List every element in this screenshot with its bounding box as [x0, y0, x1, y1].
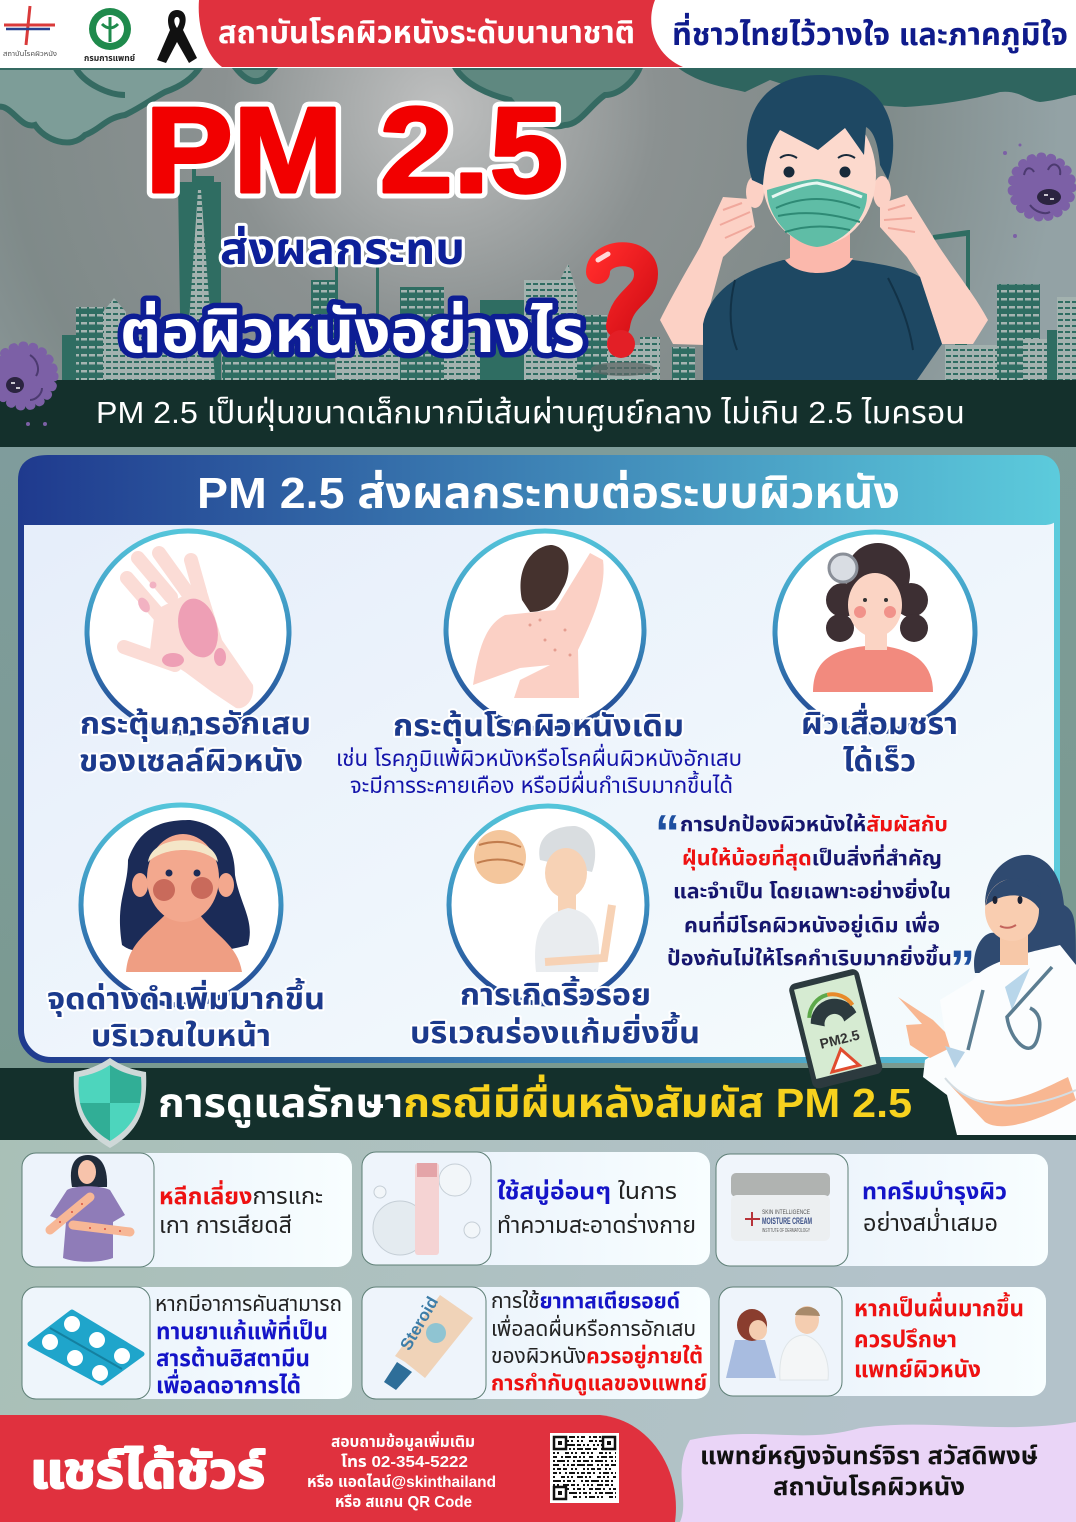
effect: inflammation	[79, 531, 311, 778]
virus left	[0, 346, 54, 426]
care card: avoid scratching	[22, 1153, 352, 1267]
effect: inflammation: กระตุ้นการอักเสบ	[80, 708, 311, 742]
pointing hand	[898, 997, 950, 1058]
question mark	[598, 254, 646, 358]
header bar	[0, 0, 1076, 68]
care card: antihistamine: ทานยาแก้แพ้ที่เป็น	[156, 1315, 328, 1344]
logo: department of medical services	[84, 8, 135, 63]
care card: moisturiser: ทาครีมบำรุงผิว	[862, 1178, 1007, 1205]
institute slogan: สถาบันโรคผิวหนังระดับนานาชาติ	[218, 15, 635, 50]
head	[746, 176, 764, 208]
effect: existing skin disease: จะมีการระคายเคือง หรือมีผื่นกำเริบมากขึ้นได้	[350, 770, 733, 798]
author credit: สถาบันโรคผิวหนัง	[773, 1473, 965, 1501]
effect: premature ageing: ผิวเสื่อมชรา	[801, 702, 958, 741]
effect: wrinkles: การเกิดริ้วรอย	[460, 975, 651, 1012]
care card: moisturiser: MOISTURE CREAM	[762, 1216, 812, 1226]
care card: consult dermatologist: หากเป็นผื่นมากขึ้น	[854, 1292, 1024, 1321]
phone	[788, 968, 884, 1090]
effect: dark spots	[47, 805, 325, 1053]
care card: mild soap: ใช้สบู่อ่อนๆ ในการ	[497, 1178, 677, 1205]
doctor quote: ”	[950, 940, 975, 996]
virus right	[1003, 144, 1072, 238]
care card: moisturiser	[716, 1154, 1048, 1266]
effect: existing skin disease	[336, 531, 742, 798]
face	[1000, 930, 1028, 965]
doctor quote: ป้องกันไม่ให้โรคกำเริบมากยิ่งขึ้น	[667, 944, 952, 970]
subtitle line 2: ต่อผิวหนังอย่างไร	[120, 298, 585, 365]
icon: black ribbon	[157, 10, 197, 63]
crossed arm	[950, 1077, 1076, 1126]
stethoscope	[968, 967, 1052, 1050]
doctor quote: และจำเป็น โดยเฉพาะอย่างยิ่งใน	[673, 878, 951, 903]
person with mask	[660, 75, 988, 380]
care card: moisturiser: อย่างสม่ำเสมอ	[863, 1207, 998, 1236]
QR code	[550, 1433, 619, 1503]
care card: avoid scratching: เกา การเสียดสี	[159, 1212, 292, 1238]
care card: consult dermatologist	[719, 1287, 1046, 1396]
contact text	[307, 1431, 496, 1511]
arms	[660, 197, 755, 345]
author credit: แพทย์หญิงจันทร์จิรา สวัสดิพงษ์	[700, 1442, 1038, 1470]
definition strip: PM 2.5 เป็นฝุ่นขนาดเล็กมากมีเส้นผ่านศูนย์กลาง ไม่เกิน 2.5 ไมครอน	[96, 395, 965, 431]
effect: wrinkles: บริเวณร่องแก้มยิ่งขึ้น	[410, 1011, 700, 1050]
care card: steroid cream: ของผิวหนังควรอยู่ภายใต้	[491, 1345, 703, 1369]
effect: premature ageing	[775, 532, 975, 778]
PM 2.5: PM 2.5	[145, 82, 563, 218]
care card: moisturiser: INSTITUTE OF DERMATOLOGY	[762, 1228, 810, 1234]
care card: steroid cream: Steroid	[396, 1293, 442, 1354]
logo: department of medical services: กรมการแพทย์	[84, 53, 135, 63]
care card: moisturiser: SKIN INTELLIGENCE	[762, 1210, 810, 1216]
care card: consult dermatologist: ควรปรึกษา	[854, 1326, 957, 1352]
hero scene	[0, 67, 1076, 382]
care card: avoid scratching: หลีกเลี่ยงการแกะ	[159, 1180, 323, 1209]
care card: antihistamine: สารต้านฮิสตามีน	[156, 1345, 310, 1371]
care card: mild soap	[362, 1152, 710, 1265]
effect: dark spots: บริเวณใบหน้า	[91, 1020, 271, 1053]
care card: steroid cream: การกำกับดูแลของแพทย์	[491, 1372, 707, 1396]
red banner	[199, 0, 683, 67]
effect: premature ageing: ได้เร็ว	[843, 744, 916, 778]
effect: inflammation: ของเซลล์ผิวหนัง	[79, 745, 303, 778]
city skyline	[62, 165, 1076, 380]
care section banner: การดูแลรักษา กรณีมีผื่นหลังสัมผัส PM 2.5	[158, 1074, 912, 1128]
care card: consult dermatologist: แพทย์ผิวหนัง	[854, 1356, 981, 1382]
care card: steroid cream: เพื่อลดผื่นหรือการอักเสบ	[491, 1314, 696, 1341]
logo: institute: สถาบันโรคผิวหนัง	[3, 50, 57, 58]
neck	[785, 225, 853, 273]
coat	[923, 945, 1076, 1135]
care card: antihistamine	[22, 1287, 352, 1399]
smog clouds	[0, 67, 640, 142]
subtitle line 1: ส่งผลกระทบ	[220, 225, 465, 274]
effect: dark spots: จุดด่างดำเพิ่มมากขึ้น	[47, 977, 325, 1017]
mask	[767, 179, 867, 247]
doctor quote: “	[655, 805, 680, 861]
care card: antihistamine: หากมีอาการคันสามารถ	[155, 1293, 342, 1316]
effect: existing skin disease: กระตุ้นโรคผิวหนังเดิม	[393, 710, 684, 744]
main title	[120, 82, 646, 365]
doctor with phone	[788, 855, 1076, 1135]
logo: institute	[3, 6, 57, 58]
doctor quote: คนที่มีโรคผิวหนังอยู่เดิม เพื่อ	[684, 911, 940, 937]
shirt	[703, 260, 942, 380]
contact text: หรือ แอดไลน์@skinthailand	[307, 1474, 496, 1491]
tagline: ที่ชาวไทยไว้วางใจ และภาคภูมิใจ	[672, 12, 1068, 53]
panel: skin effects	[18, 455, 1060, 1060]
doctor quote	[655, 805, 975, 996]
panel heading: PM 2.5 ส่งผลกระทบต่อระบบผิวหนัง	[197, 469, 900, 518]
doctor quote: ฝุ่นให้น้อยที่สุด เป็นสิ่งที่สำคัญ	[682, 844, 942, 870]
care card: mild soap: ทำความสะอาดร่างกาย	[497, 1212, 696, 1238]
PM 2.5: PM 2.5	[145, 82, 563, 218]
effect: existing skin disease: เช่น โรคภูมิแพ้ผิวหนังหรือโรคผื่นผิวหนังอักเสบ	[336, 743, 742, 772]
contact text: สอบถามข้อมูลเพิ่มเติม	[331, 1431, 475, 1452]
icon: shield	[74, 1058, 146, 1148]
phone: PM2.5	[818, 1026, 861, 1052]
contact text: โทร 02-354-5222	[341, 1454, 468, 1471]
definition strip	[0, 380, 1076, 447]
care card: antihistamine: เพื่อลดอาการได้	[156, 1369, 301, 1398]
footer share bar	[0, 1415, 676, 1522]
effect: wrinkles	[410, 806, 700, 1050]
panel heading	[18, 455, 1060, 525]
care card: steroid cream	[362, 1287, 710, 1399]
hair	[974, 855, 1076, 973]
doctor quote: การปกป้องผิวหนังให้ สัมผัสกับ	[680, 814, 948, 836]
care card: steroid cream: การใช้ยาทาสเตียรอยด์	[491, 1289, 680, 1313]
author credit	[680, 1422, 1076, 1522]
footer share bar: แชร์ได้ชัวร์	[30, 1443, 266, 1499]
care section banner	[0, 1058, 1076, 1148]
contact text: หรือ สแกน QR Code	[335, 1494, 472, 1511]
